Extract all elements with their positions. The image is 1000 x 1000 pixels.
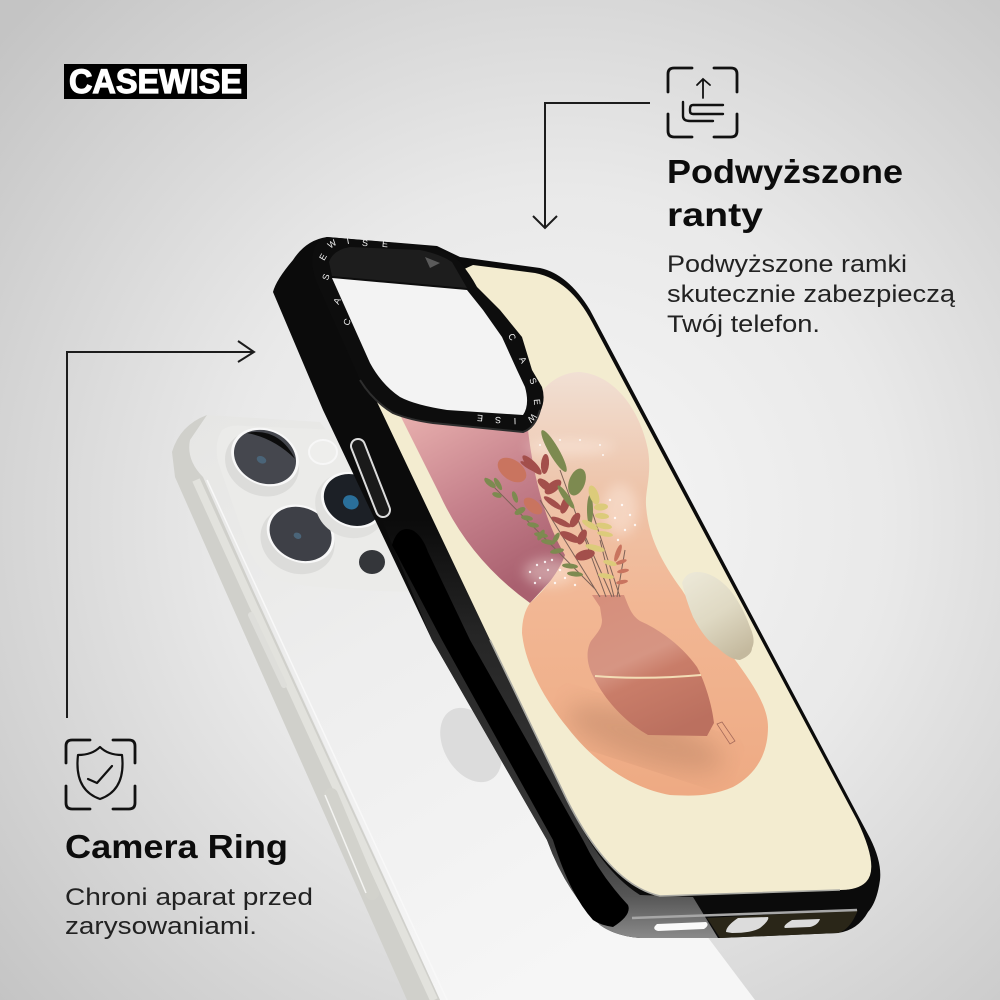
text: raised edges description: Podwyższone ramki — [667, 251, 907, 278]
stone — [682, 572, 754, 660]
apple logo — [428, 697, 514, 793]
logo: CASEWISE: CASEWISE — [69, 63, 242, 101]
lip highlight — [425, 257, 440, 268]
side highlight stripe — [196, 480, 434, 1000]
side slit — [392, 529, 629, 927]
text: raised edges description: Twój telefon. — [667, 311, 820, 338]
ring lettering: C — [341, 316, 353, 327]
ring lettering: E — [382, 239, 388, 249]
peach blob — [522, 372, 768, 796]
speaker opening left — [654, 922, 708, 931]
text: raised edges description: skutecznie zabezpieczą — [667, 281, 956, 308]
ring window — [332, 278, 527, 415]
black case — [273, 237, 880, 938]
arrow: raised edges — [533, 103, 650, 228]
volume button opening — [358, 446, 383, 510]
text: camera ring description: zarysowaniami. — [65, 913, 257, 940]
lidar — [359, 550, 385, 574]
ring lettering: S — [495, 415, 501, 425]
ring lettering — [317, 236, 542, 426]
signature — [717, 722, 735, 744]
lens 1 — [214, 416, 311, 508]
vase — [588, 595, 714, 736]
ring inner lip — [329, 247, 467, 288]
cream back — [377, 265, 871, 896]
white speckles — [529, 439, 636, 586]
body edge glint — [207, 480, 447, 1000]
ring lettering: C — [506, 332, 518, 343]
phone side edge — [172, 415, 440, 1000]
ring lettering: I — [346, 236, 350, 246]
heading: Podwyższone ranty: Podwyższone — [667, 153, 903, 190]
case back artwork — [377, 265, 871, 896]
bouquet stems — [485, 470, 625, 597]
usb opening — [726, 917, 768, 933]
maroon leaves — [519, 453, 596, 562]
ring lettering: S — [527, 376, 539, 386]
volume button — [251, 615, 284, 685]
ring lettering: E — [317, 252, 329, 262]
terracotta leaves — [493, 453, 629, 585]
speaker opening right — [784, 919, 820, 928]
translucent side band — [382, 520, 718, 938]
bottom lip highlight — [632, 910, 857, 918]
olive bottom lip — [707, 910, 858, 938]
ring lower bevel — [360, 380, 540, 432]
ring lettering: A — [517, 355, 529, 365]
ring lettering: I — [514, 416, 516, 426]
arrow: camera ring — [67, 341, 254, 718]
ring lettering: E — [532, 399, 542, 405]
flash — [309, 440, 337, 464]
ring body — [312, 237, 544, 432]
lens 2 — [249, 492, 347, 586]
ring lettering: S — [362, 238, 368, 248]
green leaves — [483, 428, 593, 577]
heading: Camera Ring: Camera Ring — [65, 828, 288, 865]
camera plateau — [217, 426, 420, 592]
icon: raised edges — [668, 68, 737, 137]
case frame — [273, 237, 880, 938]
vase shadow — [566, 698, 724, 778]
ring lettering: W — [525, 411, 539, 425]
pink blob — [400, 415, 570, 603]
vase gold line — [595, 675, 701, 678]
phone body — [189, 415, 755, 1000]
lens 3 — [304, 460, 397, 550]
ring lettering: S — [320, 272, 332, 282]
icon: shield check — [66, 740, 135, 809]
side button — [325, 795, 372, 893]
ring lettering: E — [477, 413, 483, 423]
camera ring — [312, 236, 544, 432]
ring lettering: A — [331, 296, 343, 306]
cream silver edge — [490, 640, 840, 896]
yellow leaves — [581, 484, 617, 580]
text: camera ring description: Chroni aparat przed — [65, 884, 313, 911]
white iPhone — [172, 415, 755, 1000]
heading: Podwyższone ranty: ranty — [667, 196, 764, 233]
ring lettering: W — [326, 237, 339, 251]
dusty speckle haze — [524, 439, 638, 586]
